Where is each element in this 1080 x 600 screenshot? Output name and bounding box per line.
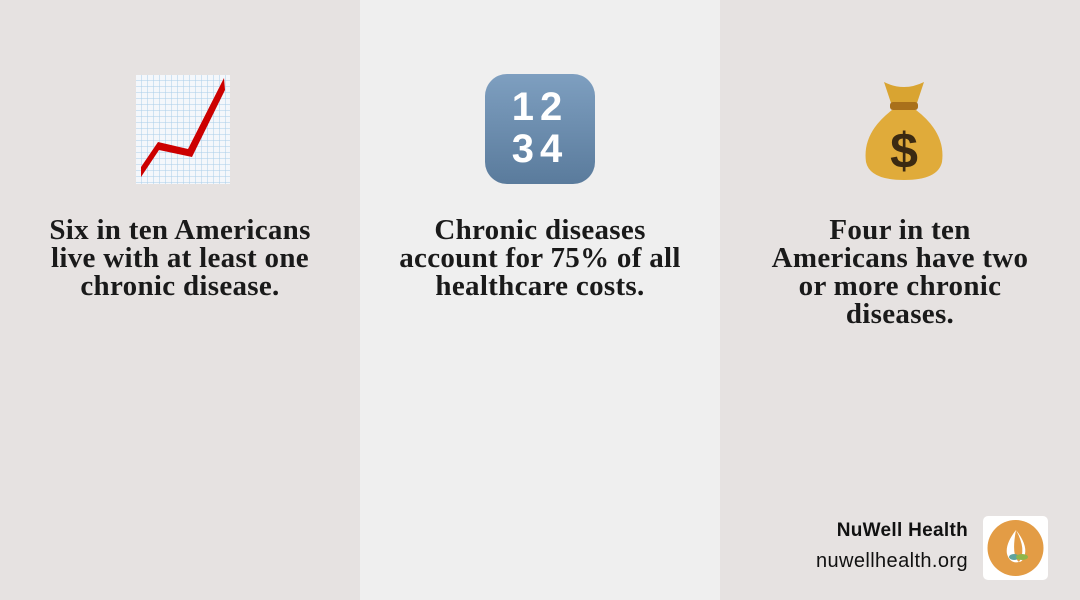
brand: name and url: NuWell Health xyxy=(837,520,968,541)
text: stat 3: diseases. xyxy=(846,298,954,330)
brand: name and url xyxy=(816,520,968,572)
panel: middle xyxy=(360,0,720,600)
logo xyxy=(983,516,1048,580)
text: stat 2: Chronic diseases xyxy=(434,214,646,246)
text: stat 3 xyxy=(772,214,1028,330)
icon: 1234: 34 xyxy=(512,127,568,171)
panel: right xyxy=(720,0,1080,600)
brand: name and url: nuwellhealth.org xyxy=(816,550,968,572)
icon: chart xyxy=(136,75,230,184)
text: stat 1: live with at least one xyxy=(51,242,309,274)
text: stat 3: Four in ten xyxy=(829,214,971,246)
text: stat 2: healthcare costs. xyxy=(435,270,645,302)
text: stat 1: chronic disease. xyxy=(80,270,280,302)
panel: left xyxy=(0,0,360,600)
text: stat 2 xyxy=(399,214,681,302)
text: stat 1: Six in ten Americans xyxy=(49,214,311,246)
text: stat 2: account for 75% of all xyxy=(399,242,681,274)
icon: money bag xyxy=(866,82,942,180)
text: stat 3: Americans have two xyxy=(772,242,1028,274)
icon: money bag: $ xyxy=(890,123,918,179)
text: stat 3: or more chronic xyxy=(799,270,1001,302)
text: stat 1 xyxy=(49,214,311,302)
icon: 1234: 12 xyxy=(512,85,568,129)
icon: 1234 xyxy=(485,74,595,184)
